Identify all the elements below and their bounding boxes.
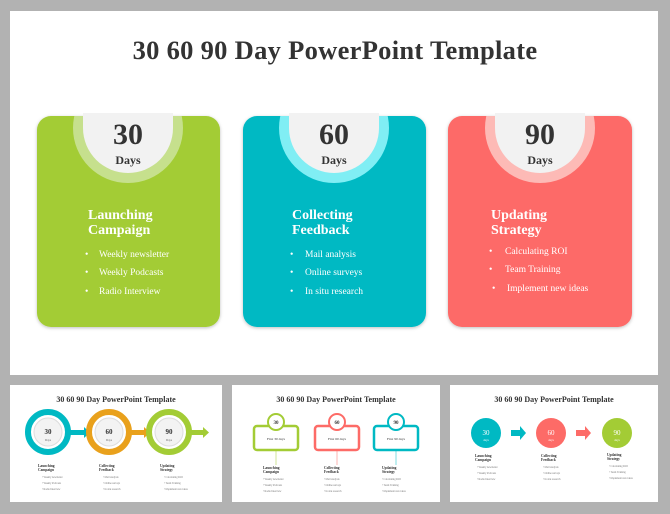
- thumbnail: solid circles: 30 60 90 Day PowerPoint Template: [494, 395, 614, 404]
- panel: 90 days: Team Training: [505, 265, 561, 275]
- thumbnail: circles with arrows: Days: [166, 438, 173, 442]
- thumbnail: solid circles: Collecting: [541, 454, 557, 458]
- panel: 90 days: [446, 113, 634, 330]
- thumbnail: solid circles: Launching: [475, 454, 492, 458]
- thumbnail: circles with arrows: Days: [45, 438, 52, 442]
- panel: 90 days: Days: [527, 153, 553, 167]
- thumbnail: boxes: 30: [274, 421, 279, 426]
- panel: 60 days: 60: [319, 118, 349, 151]
- panel: 90 days: Updating: [491, 208, 547, 223]
- panel: 30 days: Weekly Podcasts: [99, 268, 164, 278]
- panel: 90 days: •: [489, 247, 492, 257]
- thumbnail: circles with arrows: Campaign: [38, 468, 54, 472]
- thumbnail: circles with arrows: • Weekly newsletter: [42, 476, 63, 479]
- thumbnail: boxes: First 90 days: [387, 437, 406, 441]
- thumbnail: boxes: Collecting: [324, 466, 340, 470]
- thumbnail: solid circles: 60: [548, 429, 555, 437]
- thumbnail: solid circles: Updating: [607, 453, 622, 457]
- panel: 30 days: 30: [113, 118, 143, 151]
- thumbnail: circles with arrows: 30: [44, 428, 52, 436]
- panel: 60 days: Days: [321, 153, 347, 167]
- thumbnail: boxes: 30 60 90 Day PowerPoint Template: [276, 395, 396, 404]
- thumbnail: boxes: Updating: [382, 466, 397, 470]
- panel: 90 days: 90: [525, 118, 555, 151]
- thumbnail: circles with arrows: • Implement new ideas: [164, 488, 188, 491]
- panel: 30 days: •: [85, 268, 88, 278]
- thumbnail: circles with arrows: Days: [106, 438, 113, 442]
- thumbnail: circles with arrows: 30 60 90 Day PowerPoint Template: [56, 395, 176, 404]
- thumbnail: circles with arrows: Collecting: [99, 464, 115, 468]
- panel: 90 days: •: [492, 284, 495, 294]
- thumbnail: solid circles: days: [614, 438, 621, 442]
- thumbnail: circles with arrows: • Weekly Podcasts: [42, 482, 61, 485]
- panel: 90 days: Calculating ROI: [505, 247, 568, 257]
- thumbnail: boxes: 60: [334, 421, 340, 426]
- thumbnail: boxes: • Weekly newsletter: [263, 478, 284, 481]
- thumbnail: solid circles: Campaign: [475, 458, 491, 462]
- panel: 60 days: [241, 113, 428, 330]
- title: 30 60 90 Day PowerPoint Template: [133, 35, 537, 65]
- thumbnail: boxes: • Radio Interview: [263, 490, 281, 493]
- thumbnail: boxes: First 30 days: [267, 437, 286, 441]
- thumbnail: solid circles: Feedback: [541, 458, 556, 462]
- thumbnail: boxes: • In situ research: [324, 490, 342, 493]
- thumbnail: solid circles: • Implement new ideas: [609, 477, 633, 480]
- thumbnail: circles with arrows: • In situ research: [103, 488, 121, 491]
- panel: 30 days: Campaign: [88, 223, 150, 238]
- panel: 60 days: •: [290, 287, 293, 297]
- panel: 30 days: Days: [115, 153, 141, 167]
- thumbnail: solid circles: • Weekly newsletter: [477, 466, 498, 469]
- thumbnail: boxes: • Implement new ideas: [382, 490, 406, 493]
- main slide: [10, 11, 658, 375]
- thumbnail: circles with arrows: Feedback: [99, 468, 114, 472]
- thumbnail: solid circles: • Online surveys: [543, 472, 560, 475]
- thumbnail: boxes: First 60 days: [328, 437, 347, 441]
- thumbnail: solid circles: 90: [614, 429, 621, 437]
- panel: 60 days: Feedback: [292, 223, 350, 238]
- thumbnail: circles with arrows: Launching: [38, 464, 55, 468]
- thumbnail: solid circles: days: [548, 438, 555, 442]
- thumbnail: boxes: Launching: [263, 466, 280, 470]
- panel: 60 days: In situ research: [305, 287, 363, 297]
- panel: 30 days: •: [85, 250, 88, 260]
- thumbnail: solid circles: [450, 385, 658, 502]
- thumbnail: solid circles: days: [483, 438, 490, 442]
- thumbnail: solid circles: • Team Training: [609, 471, 626, 474]
- thumbnail: boxes: Strategy: [382, 470, 395, 474]
- thumbnail: boxes: • Calculating ROI: [382, 478, 401, 481]
- thumbnail: solid circles: • Mail analysis: [543, 466, 558, 469]
- thumbnail: circles with arrows: • Team Training: [164, 482, 181, 485]
- thumbnail: circles with arrows: • Radio Interview: [42, 488, 60, 491]
- thumbnail: boxes: • Mail analysis: [324, 478, 339, 481]
- thumbnail: circles with arrows: 60: [106, 428, 113, 436]
- panel: 30 days: Weekly newsletter: [99, 250, 170, 260]
- thumbnail: circles with arrows: 90: [166, 428, 173, 436]
- thumbnail: boxes: • Team Training: [382, 484, 399, 487]
- thumbnail: solid circles: • Calculating ROI: [609, 465, 628, 468]
- thumbnail: boxes: Feedback: [324, 470, 339, 474]
- thumbnail: boxes: 90: [394, 421, 399, 426]
- panel: 60 days: •: [290, 268, 293, 278]
- panel: 90 days: Strategy: [491, 223, 542, 238]
- panel: 60 days: •: [290, 250, 293, 260]
- thumbnail: solid circles: • Weekly Podcasts: [477, 472, 496, 475]
- thumbnail: solid circles: 30: [482, 429, 490, 437]
- thumbnail: boxes: • Online surveys: [324, 484, 341, 487]
- panel: 90 days: •: [489, 265, 492, 275]
- thumbnail: boxes: • Weekly Podcasts: [263, 484, 282, 487]
- thumbnail: solid circles: Strategy: [607, 457, 620, 461]
- thumbnail: circles with arrows: Updating: [160, 464, 175, 468]
- panel: 30 days: •: [85, 287, 88, 297]
- panel: 60 days: Online surveys: [305, 268, 363, 278]
- thumbnail: solid circles: • Radio Interview: [477, 478, 495, 481]
- thumbnail: circles with arrows: • Mail analysis: [103, 476, 118, 479]
- thumbnail: circles with arrows: [10, 385, 222, 502]
- thumbnail: circles with arrows: Strategy: [160, 468, 173, 472]
- panel: 30 days: Launching: [88, 208, 153, 223]
- thumbnail: circles with arrows: • Calculating ROI: [164, 476, 183, 479]
- panel: 30 days: [35, 113, 222, 330]
- panel: 60 days: Mail analysis: [305, 250, 356, 260]
- thumbnail: solid circles: • In situ research: [543, 478, 561, 481]
- thumbnail: circles with arrows: • Online surveys: [103, 482, 120, 485]
- panel: 30 days: Radio Interview: [99, 287, 161, 297]
- thumbnail: boxes: [232, 385, 440, 502]
- thumbnail: boxes: Campaign: [263, 470, 279, 474]
- panel: 90 days: Implement new ideas: [507, 284, 589, 294]
- panel: 60 days: Collecting: [292, 208, 353, 223]
